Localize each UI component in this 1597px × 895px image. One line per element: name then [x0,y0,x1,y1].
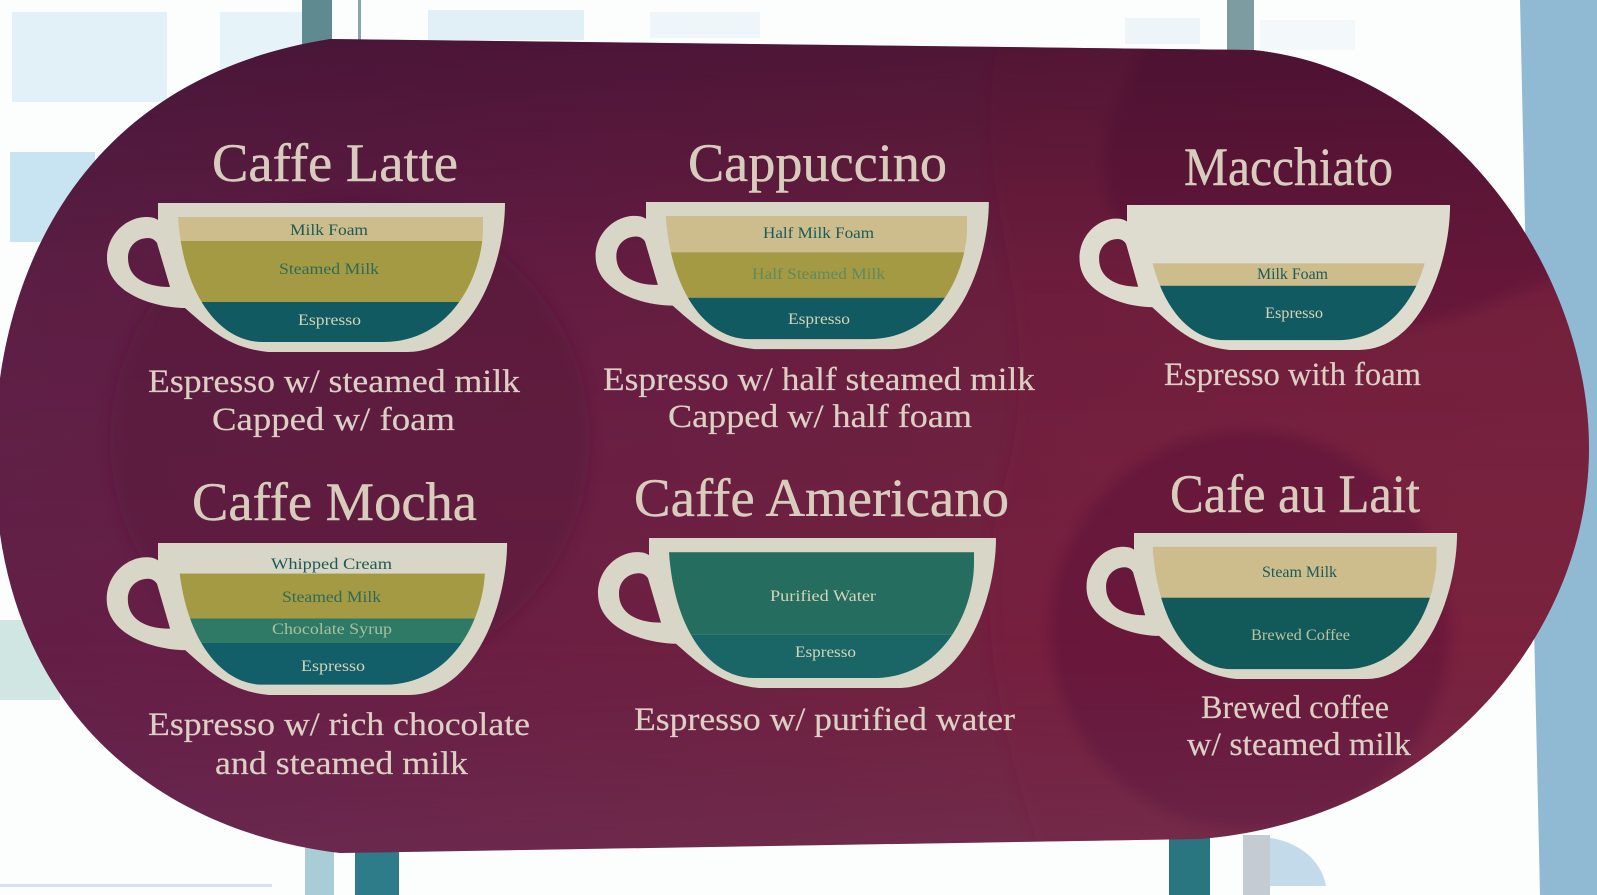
description: Caffe Latte: Capped w/ foam [212,402,455,438]
cup: Caffe Mocha [107,543,507,695]
cup: Cafe au Lait: Steam Milk [1262,564,1337,581]
cup: Caffe Americano: Espresso [795,644,856,661]
cup: Caffe Latte: Espresso [298,312,361,329]
description: Cappuccino: Espresso w/ half steamed milk [603,362,1036,398]
cup: Caffe Latte: Milk Foam [290,222,369,239]
cup: Macchiato: Milk Foam [1257,266,1329,283]
description: Cappuccino: Capped w/ half foam [668,399,972,435]
cup: Cafe au Lait: Brewed Coffee [1251,627,1350,644]
description: Cafe au Lait: Brewed coffee [1201,690,1389,726]
cup: Caffe Mocha: Whipped Cream [271,556,393,573]
cup: Cappuccino: Half Steamed Milk [752,266,885,283]
cup: Cappuccino [596,202,989,349]
heading: Caffe Mocha: Caffe Mocha [192,472,477,532]
cup: Cappuccino: Espresso [788,311,850,328]
heading: Caffe Latte: Caffe Latte [212,133,458,193]
poles [302,0,1326,895]
cup: Cappuccino: Half Milk Foam [763,225,875,242]
cup: Caffe Latte [107,203,505,352]
cup: Macchiato: Espresso [1265,305,1323,322]
description: Cafe au Lait: w/ steamed milk [1187,727,1411,763]
cup: Caffe Americano [598,538,996,688]
cup: Caffe Mocha: Espresso [301,658,365,675]
cup: Macchiato [1080,205,1450,350]
description: Cafe au Lait [1187,690,1411,763]
heading: Macchiato: Macchiato [1184,137,1393,197]
description: Caffe Mocha [148,707,530,782]
cup: Caffe Americano: Purified Water [770,588,877,605]
description: Caffe Latte [148,364,521,438]
description: Caffe Mocha: and steamed milk [215,746,469,782]
description: Cappuccino [603,362,1036,435]
heading: Cappuccino: Cappuccino [688,133,947,193]
heading: Caffe Americano: Caffe Americano [634,468,1009,528]
cup: Caffe Latte: Steamed Milk [279,261,379,278]
description: Macchiato: Espresso with foam [1164,357,1421,393]
description: Caffe Latte: Espresso w/ steamed milk [148,364,521,400]
description: Caffe Americano: Espresso w/ purified water [634,702,1015,738]
heading: Cafe au Lait: Cafe au Lait [1170,464,1420,524]
description: Caffe Mocha: Espresso w/ rich chocolate [148,707,530,743]
cup: Cafe au Lait [1087,533,1457,679]
cup: Caffe Mocha: Steamed Milk [282,589,381,606]
cup: Caffe Mocha: Chocolate Syrup [272,621,392,638]
